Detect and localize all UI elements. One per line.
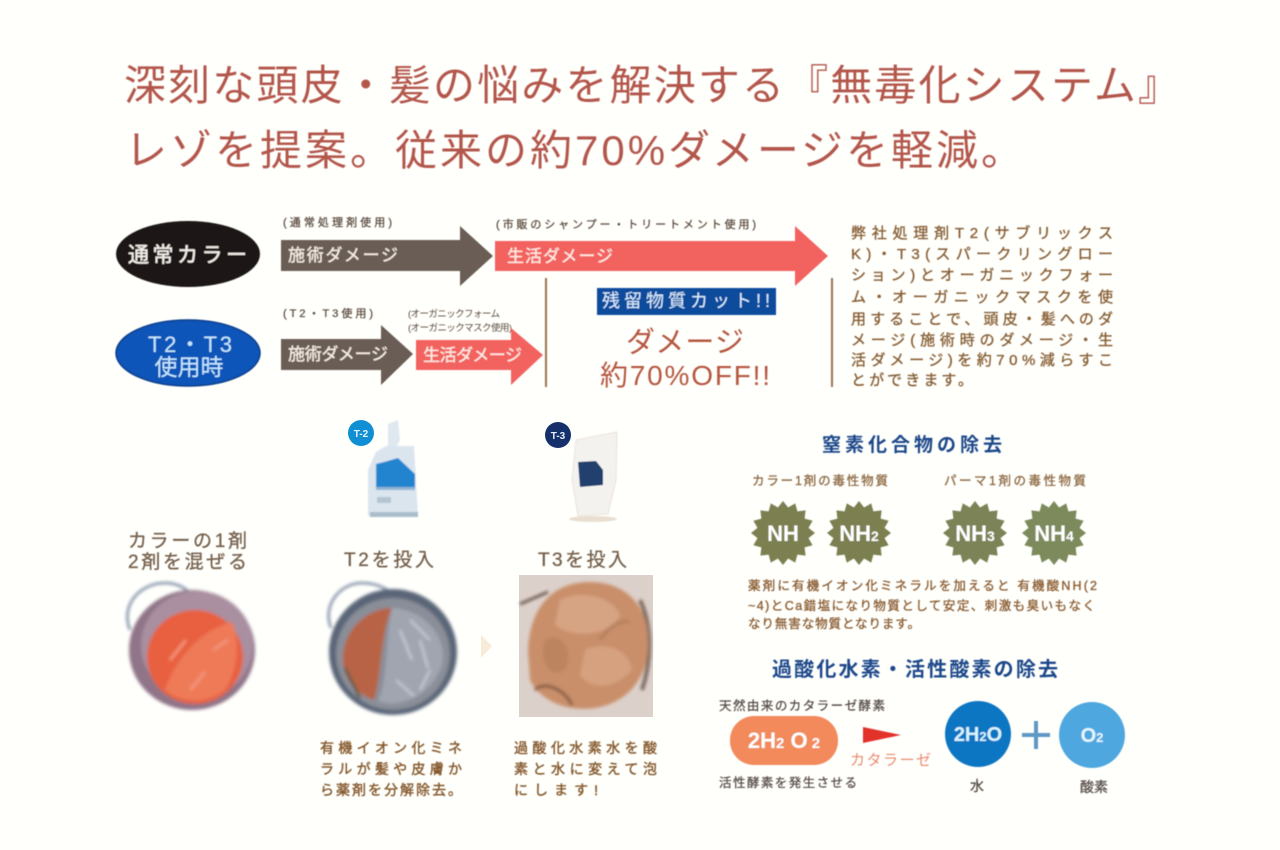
caption: T2: 有機イオン化ミネ [320,740,462,756]
badge: T2 T3 use: 使用時 [154,354,224,380]
arrow: life damage normal [495,226,828,286]
label: T2 T3: (T2・T3使用) [283,307,373,320]
panel: peroxide removal [719,658,1125,795]
arrow: treatment damage reduced: 施術ダメージ [288,345,388,364]
badge: normal color: 通常カラー [128,244,247,267]
label: catalase: カタラーゼ [850,752,931,769]
callout: damage 70 percent off: 約70%OFF!! [600,360,770,391]
photo: orange mix bowl [127,583,255,710]
label: organic products: (オーガニックフォーム [408,309,500,320]
label: water: 水 [970,778,984,794]
icon: T3 badge: T-3 [551,431,566,442]
icon: T3 tube [569,432,617,522]
icon: T2 pouch [368,420,418,517]
heading: 窒素化合物の除去 [822,434,1002,456]
text block: description: K)・T3(スパークリングロー [851,246,1113,263]
step 1 heading: カラーの1剤 [128,530,247,552]
caption: T2 [320,740,462,798]
text block: description: とができます。 [851,372,973,389]
label: catalase enzyme: 天然由来のカタラーゼ酵素 [719,698,885,713]
divider left [545,278,547,387]
pill: 2H2O2 [730,716,838,765]
icon: T2 badge [348,420,374,446]
arrow: step chevron [481,635,492,658]
text block: nitrogen note: なり無害な物質となります。 [748,616,920,631]
label: retail products: (市販のシャンプー・トリートメント使用) [496,218,756,231]
arrow: treatment damage normal: 施術ダメージ [288,246,398,265]
divider right [831,278,833,387]
photo: T3 foam bowl [519,575,653,717]
photo: T2 bowl [329,583,457,715]
icon: plus [1022,721,1050,749]
text block: nitrogen note [748,578,1097,631]
text block: description: 活ダメージ)を約70%減らすこ [851,352,1113,369]
arrow: reaction [863,727,901,743]
label: perm agent toxins: パーマ1剤の毒性物質 [944,473,1086,488]
circle: O2 [1059,702,1125,768]
text block: description [851,224,1113,389]
caption: T3: 過酸化水素水を酸 [514,740,657,756]
icon: NH [751,501,815,565]
icon: NH3: NH3 [955,521,995,546]
label: oxygen: 酸素 [1080,779,1108,795]
callout: damage 70 percent off: ダメージ [626,326,744,359]
arrow: life damage reduced [416,328,543,385]
text block: description: メージ(施術時のダメージ・生 [851,332,1113,349]
circle: 2H2O: 2H2O [954,724,1002,746]
caption: T3: 素と水に変えて泡 [514,761,657,777]
caption: T3 [514,740,657,798]
label: color agent toxins: カラー1剤の毒性物質 [752,473,888,488]
text block: nitrogen note: 薬剤に有機イオン化ミネラルを加えると 有機酸NH(2 [748,578,1097,593]
text block: description: 用することで、頭皮・髪へのダ [851,311,1113,328]
icon: NH4 [1022,501,1086,565]
icon: NH4: NH4 [1034,521,1074,546]
text block: description: 弊社処理剤T2(サブリックス [851,224,1113,242]
panel: nitrogen compounds [748,434,1097,631]
arrow: life damage reduced: 生活ダメージ [423,346,522,365]
step 2 heading: T2を投入 [344,549,434,571]
step 1 heading [128,530,247,573]
badge: normal color [116,221,260,287]
title [124,62,1180,174]
caption: T2: ラルが髪や皮膚か [320,761,462,777]
icon: NH2 [827,501,891,565]
icon: NH3 [943,501,1007,565]
badge: T2 T3 use [116,320,260,386]
label: normal agent: (通常処理剤使用) [283,216,392,229]
icon: NH2: NH2 [839,521,879,546]
panel: damage comparison [116,216,1113,391]
icon: NH: NH [767,521,799,546]
text block: description: ション)とオーガニックフォー [851,267,1113,284]
title: 深刻な頭皮・髪の悩みを解決する『無毒化システム』 [124,62,1180,109]
text block: nitrogen note: ~4)とCa錯塩になり物質として安定、刺激も臭いもなく [748,598,1095,613]
arrow: life damage normal: 生活ダメージ [507,247,613,266]
step 3 heading: T3を投入 [538,549,627,571]
circle: O2: O2 [1081,725,1103,747]
badge: T2 T3 use: T2・T3 [148,332,232,357]
caption: T3: にします! [514,782,598,798]
arrow: treatment damage normal [281,226,493,286]
title: レゾを提案。従来の約70%ダメージを軽減。 [125,127,1023,174]
callout: residue cut [597,288,776,315]
label: generates active enzyme: 活性酵素を発生させる [719,776,857,790]
arrow: treatment damage reduced [281,325,413,385]
callout: damage 70 percent off [600,326,770,391]
step 1 heading: 2剤を混ぜる [128,551,247,573]
callout: residue cut: 残留物質カット!! [602,291,770,311]
text block: description: ム・オーガニックマスクを使 [851,289,1113,306]
icon: T3 badge [545,422,571,448]
caption: T2: ら薬剤を分解除去。 [320,782,462,798]
icon: T2 badge: T-2 [354,429,369,440]
label: organic products [408,309,512,334]
circle: 2H2O [945,701,1011,767]
heading: 過酸化水素・活性酸素の除去 [772,658,1058,681]
panel: mixing steps [127,420,657,798]
pill: 2H2O2: 2H2 O 2 [748,728,820,753]
label: organic products: (オーガニックマスク使用) [408,322,512,334]
